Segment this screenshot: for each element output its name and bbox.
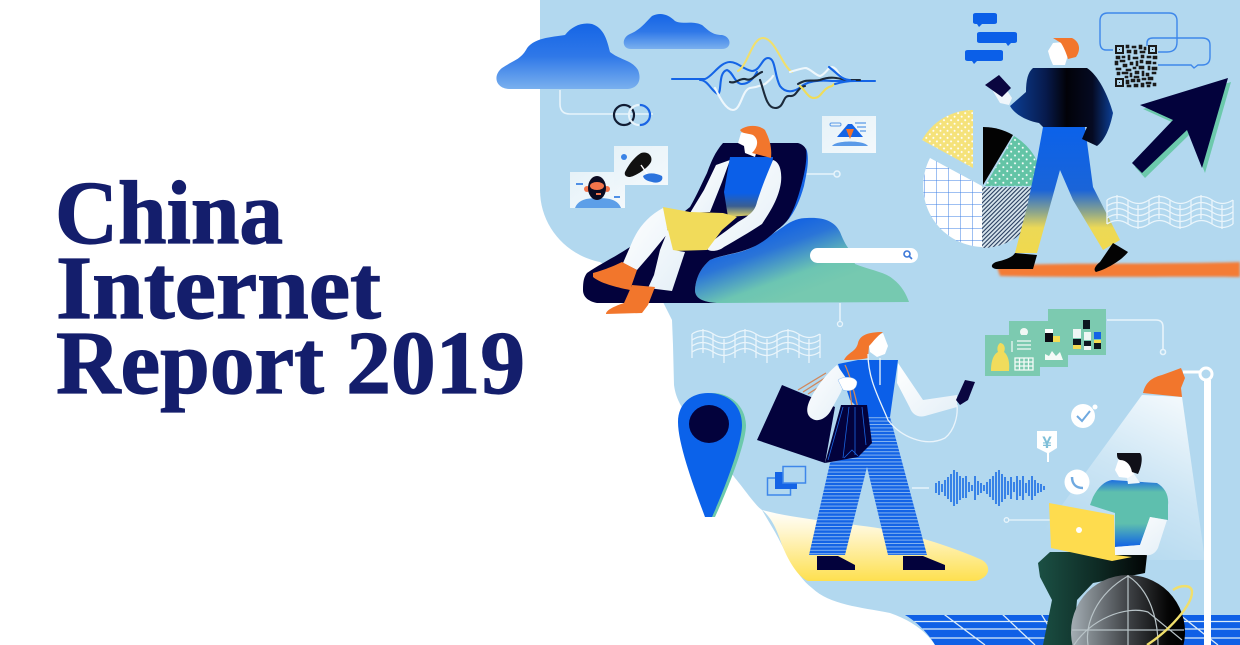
- man hair: [1117, 453, 1142, 474]
- pie: green dotted slice: [985, 136, 1043, 186]
- pie chart: [922, 110, 1043, 248]
- pie: yellow dotted slice: [922, 110, 973, 168]
- woman arm left: [807, 365, 846, 420]
- title: China: [55, 164, 283, 263]
- connector from cards: [1107, 320, 1166, 354]
- mesh: left wave: [692, 329, 820, 363]
- icon: phone badge: [1064, 470, 1090, 494]
- audio waveform: [936, 470, 1044, 506]
- copy icon: [768, 466, 806, 495]
- woman legs: [623, 208, 685, 291]
- woman sleeveless top: [838, 360, 898, 417]
- lamp pole: [1204, 380, 1211, 645]
- icon: yuan tag: [1037, 431, 1057, 462]
- woman hair: [740, 126, 771, 158]
- sound wave lines: [672, 38, 875, 110]
- man sweater: [1010, 68, 1113, 146]
- man arm: [1115, 517, 1167, 555]
- woman shoes: [817, 556, 945, 570]
- lamp light cone: [1022, 395, 1205, 560]
- shopping woman: [757, 332, 975, 570]
- connector from chair: [805, 171, 840, 177]
- woman large bag: [757, 385, 835, 463]
- earphone cord: [868, 354, 957, 442]
- woman shoes: [593, 262, 655, 314]
- woman front arm: [706, 160, 781, 251]
- man phone: [985, 75, 1011, 97]
- icon: small cloud: [624, 14, 730, 49]
- blue floor grid: [905, 612, 1240, 645]
- title: Internet: [56, 239, 381, 338]
- card: colour blocks: [1048, 309, 1106, 355]
- mesh: right wave: [1107, 195, 1233, 229]
- woman small bag: [825, 405, 872, 463]
- man hand: [990, 80, 1012, 105]
- icon: large cloud: [496, 23, 640, 89]
- man trousers: [1015, 127, 1120, 253]
- woman arm right: [897, 363, 957, 417]
- lamp arm and ring: [1183, 370, 1202, 374]
- light blue background shape: [540, 0, 1240, 645]
- lamp shade: [1143, 368, 1185, 397]
- pie: hatched slice: [982, 187, 1043, 248]
- orbit ring: [1147, 586, 1192, 645]
- search bar: [810, 248, 918, 263]
- title: Report 2019: [56, 314, 525, 413]
- connector to laptop: [1004, 518, 1050, 522]
- woman hand: [838, 377, 857, 391]
- green cards: [985, 309, 1106, 376]
- man t-shirt: [1090, 480, 1168, 547]
- connector with rings: [560, 90, 653, 125]
- green hill: [695, 218, 909, 303]
- pie: grid slice: [923, 158, 982, 247]
- woman hair: [844, 332, 883, 360]
- reclining chair: [583, 143, 807, 303]
- title: [55, 164, 525, 413]
- woman face: [738, 128, 760, 157]
- card: profile: [822, 116, 876, 153]
- location pin: [678, 393, 746, 517]
- bag handles: [798, 365, 858, 408]
- seated woman: [593, 126, 781, 314]
- card: chart: [1009, 321, 1068, 367]
- man face: [1115, 458, 1134, 478]
- small bag lines: [828, 407, 866, 460]
- pie: black slice: [983, 127, 1013, 185]
- woman blue top: [724, 157, 773, 217]
- man face: [1048, 42, 1068, 65]
- woman striped trousers: [809, 417, 927, 555]
- floor lamp: [1143, 368, 1212, 645]
- chat bubbles filled: [965, 13, 1017, 64]
- man with laptop: [1038, 453, 1168, 645]
- woman back arm: [690, 160, 730, 213]
- man shoes: [992, 243, 1128, 272]
- woman phone: [956, 380, 975, 405]
- icon: check badge: [1071, 404, 1098, 428]
- orange ground strip: [997, 262, 1240, 277]
- card: profile form: [985, 335, 1040, 376]
- laptop: [1049, 503, 1132, 561]
- icon: yuan tag: ¥: [1042, 433, 1052, 452]
- woman skirt: [663, 207, 737, 251]
- chat bubbles outline: [1100, 13, 1210, 68]
- globe: [1071, 575, 1192, 645]
- man hair: [1053, 38, 1079, 59]
- woman face: [868, 333, 888, 357]
- QR code: [1115, 45, 1157, 87]
- walking man: [985, 38, 1128, 272]
- man legs: [1038, 552, 1147, 645]
- connector under search: [838, 303, 842, 326]
- man collar: [1127, 474, 1140, 484]
- audio connector line: [912, 487, 929, 489]
- card: man with beard: [570, 172, 625, 208]
- card: microphone: [614, 146, 668, 185]
- arrow cursor: [1132, 78, 1231, 178]
- yellow sand: [762, 510, 988, 581]
